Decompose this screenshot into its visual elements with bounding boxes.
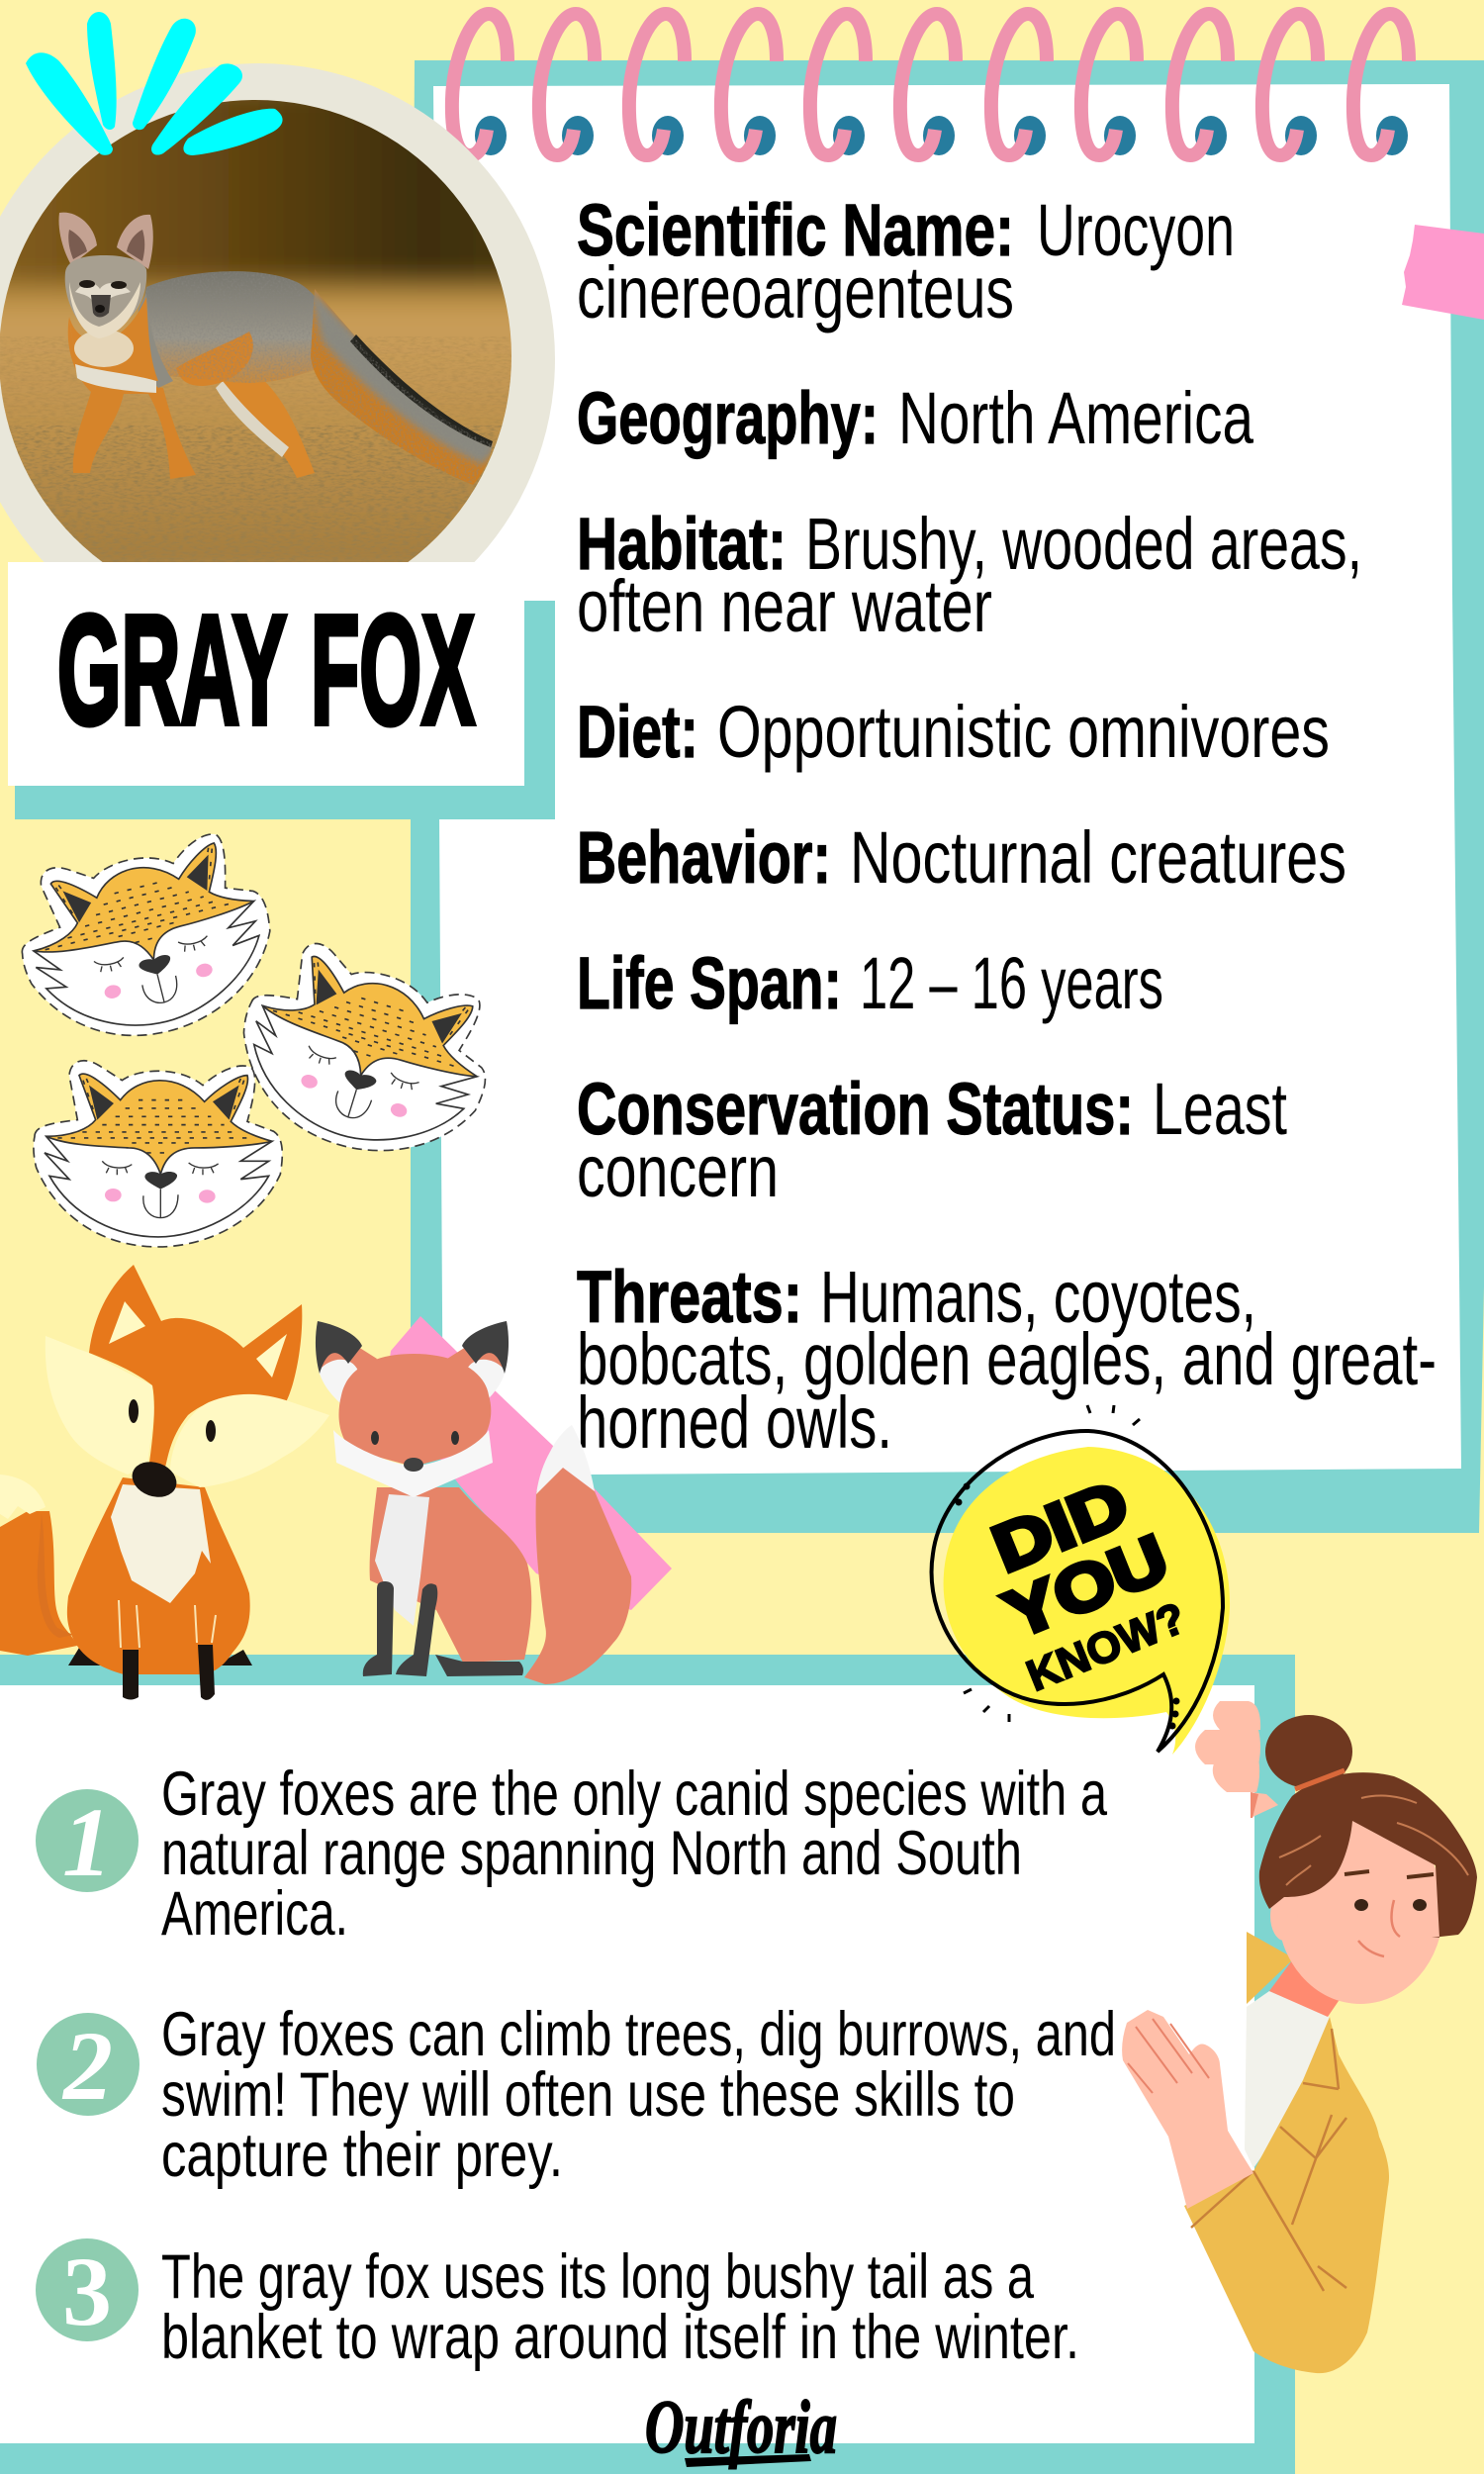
fact: diet: Opportunistic omnivores	[717, 691, 1330, 773]
fact: diet	[577, 691, 1330, 773]
title: GRAY	[57, 584, 287, 757]
fox tail	[311, 289, 493, 485]
fact 2 text: Gray foxes can climb trees, dig burrows, and	[161, 2000, 1116, 2069]
fact: behavior	[577, 816, 1346, 899]
sticker: fox face left	[3, 820, 289, 1061]
fact: threats: Humans, coyotes,	[820, 1256, 1256, 1338]
fact: conservation status: Conservation Status:	[577, 1068, 1134, 1150]
upper hand fingers	[1195, 1701, 1278, 1818]
fact: conservation status	[577, 1068, 1287, 1212]
ear	[1270, 1891, 1298, 1941]
jacket	[1184, 2017, 1389, 2373]
fact: habitat	[577, 503, 1362, 647]
illustration: coral fox	[316, 1316, 672, 1684]
sticker: fox face right	[218, 929, 510, 1181]
pink tape	[1402, 225, 1484, 320]
fact 2 number badge	[37, 2011, 139, 2121]
fact: threats: horned owls.	[577, 1381, 892, 1464]
fact: life span: Life Span:	[577, 942, 842, 1024]
fact: scientific name: Scientific Name:	[577, 189, 1014, 271]
sticker: fox face bottom	[34, 1061, 282, 1247]
fact: diet: Diet:	[577, 691, 698, 773]
fact 2 text	[161, 2000, 1116, 2190]
title: FOX	[311, 584, 475, 757]
callout: did you know speech bubble: KNOW?	[1020, 1593, 1192, 1701]
icon: cyan burst	[26, 12, 283, 155]
fact: conservation status: concern	[577, 1130, 779, 1212]
collar	[1247, 1932, 1294, 2004]
fact 1 text: natural range spanning North and South	[161, 1819, 1022, 1888]
fact: geography: Geography:	[577, 377, 879, 459]
hair	[1259, 1772, 1477, 1938]
fact: life span	[577, 942, 1163, 1024]
spiral binding coils	[452, 14, 1409, 155]
callout: did you know speech bubble: DID	[982, 1466, 1139, 1586]
eyes and mouth	[1354, 1899, 1368, 1911]
fox hind legs	[223, 376, 315, 478]
fact 1 text	[161, 1760, 1108, 1949]
neck	[1269, 1956, 1341, 2017]
fact: threats	[577, 1256, 1437, 1464]
fact: geography: North America	[898, 377, 1254, 459]
face	[1277, 1814, 1443, 2004]
fox ears	[59, 213, 97, 265]
fact 3 text	[161, 2242, 1079, 2372]
panel: notebook facts	[411, 14, 1484, 1533]
fact: scientific name: Urocyon	[1037, 189, 1235, 271]
fact 2 text: capture their prey.	[161, 2121, 563, 2190]
fact 2 text: swim! They will often use these skills to	[161, 2060, 1015, 2130]
title	[8, 562, 555, 819]
soft background and ground	[0, 100, 511, 562]
fact: threats: Threats:	[577, 1256, 802, 1338]
fact: behavior: Behavior:	[577, 816, 831, 899]
fact: conservation status: Least	[1153, 1068, 1287, 1150]
fact 3 number badge	[36, 2236, 139, 2346]
photo circle: gray fox	[0, 63, 555, 562]
illustration: orange fox	[0, 1265, 329, 1700]
fact 2 number badge: 2	[61, 2011, 113, 2121]
fact 3 number badge: 3	[62, 2236, 112, 2346]
fact 3 text: The gray fox uses its long bushy tail as a	[161, 2242, 1035, 2312]
fox body	[144, 271, 315, 383]
lower hand	[1122, 2010, 1253, 2209]
fact: life span: 12 – 16 years	[860, 942, 1163, 1024]
fact: habitat: often near water	[577, 565, 992, 647]
fact 3 text: blanket to wrap around itself in the winter.	[161, 2303, 1079, 2372]
fact 1 text: Gray foxes are the only canid species with a	[161, 1760, 1108, 1829]
fact 1 number badge: 1	[62, 1787, 112, 1897]
hair bun	[1265, 1715, 1352, 1788]
fact 1 text: America.	[161, 1879, 348, 1949]
shirt	[1245, 1991, 1330, 2168]
illustration: woman holding the panel	[1122, 1701, 1477, 2373]
fact 1 number badge	[36, 1787, 139, 1897]
fact: behavior: Nocturnal creatures	[850, 816, 1346, 899]
fact: geography	[577, 377, 1254, 459]
fact: habitat: Habitat:	[577, 503, 787, 585]
fox head	[65, 255, 146, 331]
callout: did you know speech bubble	[932, 1405, 1230, 1755]
logo: Outforia: Outforia	[645, 2386, 837, 2469]
callout: did you know speech bubble: YOU	[994, 1521, 1178, 1653]
fact: scientific name: cinereoargenteus	[577, 251, 1014, 333]
panel: did you know facts	[0, 1655, 1295, 2474]
fact: scientific name	[577, 189, 1235, 333]
fox chest and front legs	[68, 317, 196, 479]
